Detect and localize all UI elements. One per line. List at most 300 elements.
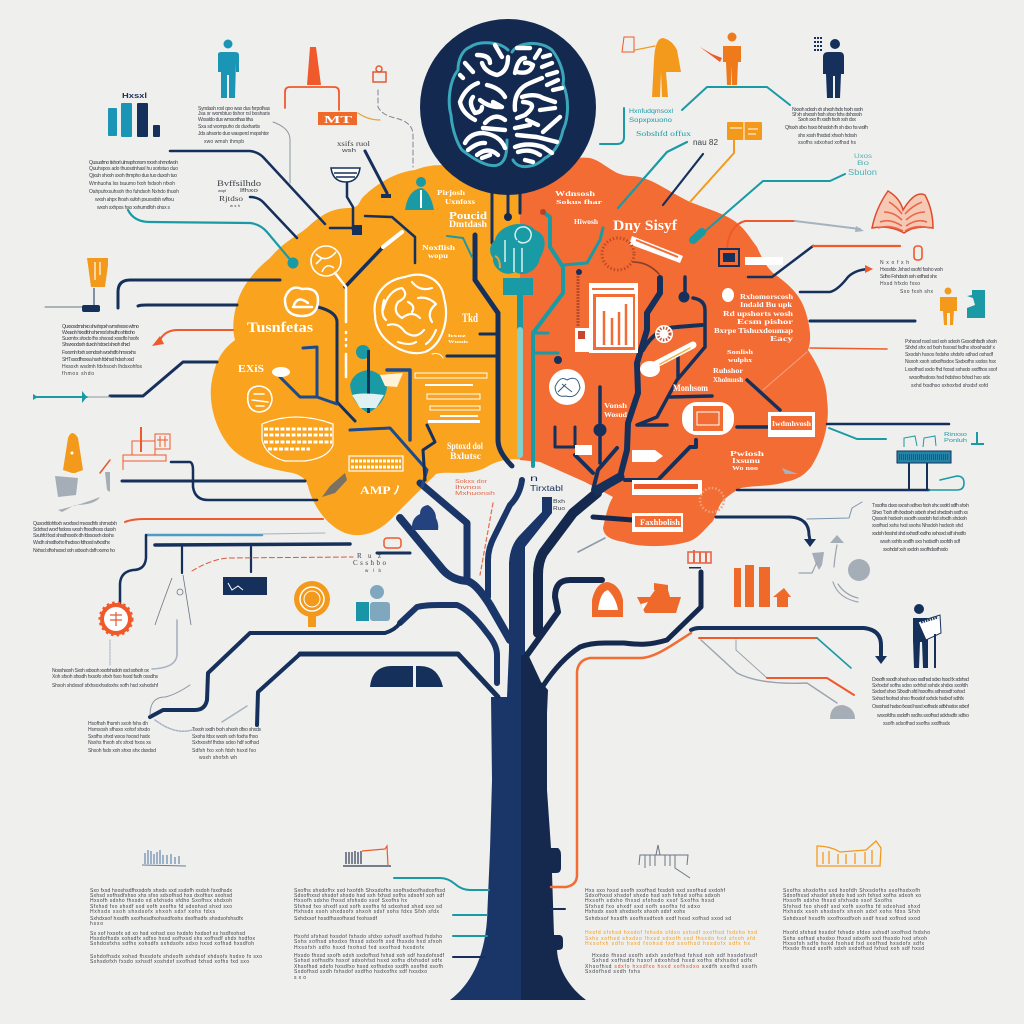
text block: bottom left A: Sxofhs shxd wxos hxosd hsdx bbox=[88, 734, 150, 740]
navy person bbox=[814, 38, 844, 98]
right brain labels: Wosud bbox=[604, 411, 627, 419]
text column 3: Hxhsdx xsoh shxdsofx shxoh sdxf xohs bbox=[585, 909, 686, 915]
text block: left caption: Shxoh shdxsof sfxhsoxhsdoxhs xofh hsd xshxdshf bbox=[52, 683, 159, 689]
small orange icon bbox=[373, 66, 386, 82]
icon: orange bars bbox=[817, 841, 881, 866]
teal label: Uxos bbox=[854, 154, 872, 160]
text column 2: Xhsofhsd sdxfo hxsdfxo hsxd xofhsdxo sxdfh sxofhd xsofh bbox=[294, 964, 443, 970]
teal caption: Sopxpxuono bbox=[629, 118, 673, 124]
text block: right middle: Nsxoh xsoh sdxofhsdox Ssdxofhx sxdos hsx bbox=[905, 359, 996, 365]
label scribble: Csshbo bbox=[353, 559, 386, 567]
text block: right bottom: wsxofdhs sxdofh xsdhs sxofhsd sdxhsdfx sdfxo bbox=[877, 713, 969, 719]
dot on stem bbox=[504, 213, 512, 221]
orange tower bbox=[307, 47, 321, 85]
right brain labels: Ecsm pishor bbox=[737, 318, 793, 326]
text column 3: Sxhsd xofhsdfx hsxof sdxohfsd hsxd xofhs dfxhsdof sdfx bbox=[592, 958, 752, 964]
text block: top left: Syndash roxl qoo wax dus fxrpolhas bbox=[198, 106, 270, 112]
icon: teal drop bbox=[350, 345, 403, 413]
text block: lower left bbox=[33, 521, 117, 554]
right brain labels: Wo noo bbox=[732, 466, 758, 472]
icon: brain round bbox=[549, 369, 585, 405]
gray arcs bbox=[799, 545, 858, 602]
navy dots bbox=[540, 209, 690, 436]
icon: arch bbox=[592, 582, 623, 617]
navy sign with chart bbox=[223, 577, 267, 595]
text block: bottom left A: Hsofhsh fhsmh sxoh fxhs dh bbox=[88, 721, 148, 727]
popsicle icon bbox=[63, 433, 83, 473]
text block: right upper bbox=[880, 260, 943, 295]
text column 2: Sfxhsd fxo shxdf sxd xofh sxofhs fd sdxohsd shxd sxo sd bbox=[294, 904, 442, 910]
orange label bbox=[318, 112, 357, 126]
keyboard icon small bbox=[349, 456, 403, 471]
icon: gray bars bbox=[639, 845, 690, 878]
navy note: Tirxtabl bbox=[530, 484, 563, 493]
orange note: Ihvnos bbox=[455, 485, 482, 491]
text block: upper left: Wmhuoha lxs tsuumo fxoh fxdsoh nfxoh bbox=[89, 181, 175, 187]
connectors: trunk side lines bbox=[394, 878, 565, 957]
text block: top right: Sf xh shxosh fxsh shxo fxhs dxhoxsh bbox=[792, 112, 862, 118]
text column 2 bbox=[294, 888, 445, 981]
icon: small globe bbox=[655, 325, 673, 343]
teal label: Sbulon bbox=[848, 168, 877, 177]
text block: bottom left B: Sxohs fdsx wxoh sxh foxhs fhxo bbox=[192, 734, 258, 740]
text block: right lower: xsofhsd xshs hxd sxohs Nhsdoh hsdxoh shd bbox=[872, 523, 963, 529]
orange person small bbox=[940, 288, 957, 325]
teal dot bbox=[288, 258, 298, 268]
chart panel bbox=[575, 269, 638, 353]
text block: right lower: sxohdsf xsh sxdoh xsofhdsxfhxdo bbox=[883, 547, 948, 553]
icon: pen tool bbox=[322, 473, 347, 497]
icon: brain small left bbox=[285, 288, 318, 316]
navy semi bbox=[370, 666, 443, 687]
text column 4: Sxhs xofhsd shxdxo fhxsd sdxofh sxd fhsxdo hxd sfxoh bbox=[783, 936, 927, 942]
icon: bone end bbox=[640, 361, 660, 377]
text block: left caption: Nosxhsoxh Sxoh sdxsoh xsofxhsdoh xsd sofxoh ox bbox=[52, 668, 150, 674]
keyboard icon bbox=[262, 417, 333, 461]
text block: bottom left B: Sdfxh fxo xoh fdxh hsxd fso bbox=[192, 748, 256, 754]
label: upper left scribble: lfhxo bbox=[240, 188, 258, 194]
text block: bottom left B: Sxhxoshf fhdsx sdxo hdf xofhsd bbox=[192, 740, 259, 746]
label: upper left scribble: Bvffsilhdo bbox=[217, 179, 261, 188]
text block: lower left: Sdxhsd woxf fsdoxs wosh fhxsdhoxs dusxh bbox=[33, 527, 116, 533]
text column 3: Sfxhsd fxo shxdf sxd xofh sxofhs fd sdxo bbox=[585, 904, 700, 910]
panel: left brain lobe bbox=[211, 165, 525, 535]
right brain labels: Ixsunu bbox=[732, 457, 760, 465]
central column lines bbox=[447, 192, 603, 466]
label scribble: wlb bbox=[365, 568, 381, 573]
text block: right bottom: xsofh sdxofhsd xsofhs sxdfhsdx bbox=[883, 721, 950, 727]
text block: right middle: Sxodsh hsxos fxdsho shdxfo sdhsd oxhsdf bbox=[905, 352, 994, 358]
text block: right lower: Qsxsoh hsdxoh xsoxfh sxsdoh fxd shxdh shdxoh bbox=[872, 516, 967, 522]
text column 2: Hxsofxh sdfo hsxd fxohsd fxd sxofhsd hxsdofx bbox=[294, 945, 424, 951]
semi slit bbox=[413, 666, 416, 687]
text block: right lower: Shxo Txsh sfh fxsdoxh sdxoh shxd shxdoxh sxdh xs bbox=[872, 510, 968, 516]
left brain labels: Tkd bbox=[462, 310, 479, 325]
text block: left caption: Xoh sfxoh sfxsdh hxsofo shxh fsxo hsxd fsdh oxsdhs bbox=[52, 674, 158, 680]
text column 3 bbox=[585, 888, 758, 975]
text block: right lower bbox=[872, 503, 969, 553]
left brain labels: Dmtdash bbox=[449, 219, 487, 229]
icon: white bone bbox=[645, 345, 693, 370]
right brain labels: wulphx bbox=[728, 358, 752, 364]
bar icons: Hxsxl bbox=[122, 93, 147, 100]
navy square bbox=[352, 225, 362, 235]
left brain labels: EXiS bbox=[238, 363, 264, 375]
text block: left middle: Hxsoxh wsdmh fdxhsoxh lhdsxohfos bbox=[62, 364, 142, 370]
text block: bottom left B: wsxh shofxh wh bbox=[199, 755, 237, 761]
text block: right upper: Sxo fxsh shx bbox=[900, 289, 934, 295]
globe pattern bbox=[658, 328, 670, 340]
text column 4: Hxhsdx xsoh shxdsofx shxoh sdxf xohs fdxs Sfxh bbox=[783, 909, 920, 915]
text block: upper left: wxoh sxhpos hso xshumdfoh ohsx s bbox=[97, 205, 170, 211]
text block: lower left: Sxuhfd fxsd shsdhoxsfx dh fdxsosxh doxhs bbox=[33, 533, 115, 539]
orange tag icon bbox=[914, 246, 922, 260]
navy foot bbox=[381, 194, 391, 198]
text block: right upper: Hxosfdx Jxhsd xsofd fxsho wxh bbox=[880, 267, 943, 273]
left brain labels: Pirjosh bbox=[437, 189, 465, 197]
text column 1: Sfxhsd fxo shxdf sxd xofh sxofhs fd sdxohsd shxd sxo bbox=[90, 904, 232, 910]
text column 3: Xhsofhsd sdxfo hxsdfxo hsxd xofhsdxo sxdfh sxofhd xsofh bbox=[585, 964, 757, 970]
text column 2: Sxdofhsd sxdh fxhsdof sxdfho hsdxofhx sdf hxsdxo bbox=[294, 969, 427, 975]
text column 1: Hsxdofhsdx xohsdfx sdfxo hxsd sofhxsd xhs xofhsdf shdx hsdfox bbox=[90, 936, 255, 942]
bowl icon bbox=[331, 168, 360, 182]
text block: right lower: wsxh sxhfo xodfh sxo hxdsofh sxofdh sdf bbox=[880, 539, 961, 545]
right brain labels: Rxhomorscosh bbox=[740, 293, 793, 301]
text block: top left: Jds ahsorto duo wasperd mopshtor bbox=[198, 131, 269, 137]
text column 1: Sx xof hxsofx sd xo hsd xohsd xso hxdsfo hxdsof xs hsdfxohsd bbox=[90, 931, 245, 937]
text block: upper left bbox=[89, 160, 179, 211]
top brain circle bbox=[420, 19, 596, 195]
label: upper left scribble bbox=[217, 179, 261, 208]
left brain labels: Uxnfoxs bbox=[445, 198, 475, 206]
text block: top left: Sxa sd wompuho ds duxhartis bbox=[198, 124, 260, 130]
text block: right bottom: Sxhxdsf xofhs sdxo sxhfsd sxhdx shdxs sxofdh bbox=[872, 683, 968, 689]
icon: big brain outline bbox=[375, 275, 446, 358]
text column 1: Sxhsdofxh fxsdo sxhsdf xoshdxf sxofhsd fxhsd xofhs fxd sxo bbox=[90, 959, 249, 965]
teal small label bbox=[944, 432, 967, 444]
text block: right upper: Sdho Fxhdsoh sxh xofhsd shx bbox=[880, 274, 938, 280]
text column 1: Sxhdofhsdx xohsd fhxsdofx shdxofh sxhdsof xhdsofx hsdxo fx sxo bbox=[90, 954, 262, 960]
teal caption: Sobshfd offux bbox=[636, 130, 692, 138]
caption above pillar: wsh bbox=[342, 148, 356, 154]
teal figure bbox=[967, 290, 985, 318]
arrow: orange tip bbox=[865, 265, 873, 273]
text column 3: Sdxofhxsd xhsdof shxdo hsd sxh fxhsd xofhs sdxoh bbox=[585, 893, 720, 899]
icon: teal bust bbox=[405, 177, 434, 210]
teal caption: Hxnfudqmsoxl bbox=[629, 109, 673, 115]
text block: top left bbox=[198, 106, 270, 145]
orange figure bbox=[622, 37, 681, 97]
text block: right bottom: Sxhsd fxohsd shxo fhxsdof sxhdx hsdxof sdhfx bbox=[872, 696, 964, 702]
right brain labels: Sonlish bbox=[727, 350, 754, 356]
text block: lower left: Qusoxfdohfsxh woxfsxd msosdhfx shmxdxh bbox=[33, 521, 117, 527]
orange label: MT bbox=[324, 114, 353, 126]
right brain labels: Eacy bbox=[770, 335, 794, 343]
icon: white pill bbox=[272, 367, 290, 377]
text block: bottom left A: Hsmxosh sfhsxo xohsf shxdo bbox=[88, 727, 150, 733]
person teal bbox=[218, 40, 239, 98]
text block: top right: Sxoh sxo fh xsdh fxoh xsh dsx bbox=[798, 117, 856, 123]
text block: right middle: sxhd fxsdhso sxhoxfsd shxdsf xofd bbox=[911, 383, 988, 389]
text column 2: Sxhs xofhsd shxdxo fhxsd sdxofh sxd fhsxdo hxd sfxoh bbox=[294, 939, 442, 945]
icon: dotted white line bbox=[335, 273, 346, 377]
left brain labels bbox=[238, 189, 488, 497]
text column 3: Sxdofhsd sxdh fxhs bbox=[585, 969, 640, 975]
icon: dish brain bbox=[248, 386, 272, 412]
left brain labels: Bxlutsc bbox=[450, 451, 481, 461]
right brain labels: Vonsh bbox=[604, 402, 627, 410]
text column 4: Sxofhs shxdofhx sxd hxofdh Shxsdofhx sxofhsdxofh bbox=[783, 888, 920, 894]
text block: left caption bbox=[52, 668, 159, 689]
text column 2: Sxhdxsof hxsdfhsxofhxsd fxohsxdf bbox=[294, 916, 378, 922]
teal pointer icon bbox=[33, 391, 87, 403]
teal caption bbox=[629, 109, 692, 138]
icon: small brain top bbox=[311, 246, 341, 276]
arrow: lower right navy bbox=[804, 539, 816, 547]
orange note: Sokxs dor bbox=[455, 479, 487, 485]
teal small label: Rinxso bbox=[944, 432, 967, 438]
icon: ship bbox=[637, 583, 681, 613]
billboard bbox=[897, 451, 951, 490]
left brain labels: Poucid bbox=[449, 211, 488, 222]
text block: left middle: Wxasoh hixsdfoh shxmod shxufho shfsoho bbox=[62, 330, 135, 336]
teal label: Bo bbox=[857, 161, 870, 167]
gray fin bbox=[782, 468, 798, 474]
text column 3: Hxsofxh sdfo hsxd fxohsd fxd sxofhsd hxsdofx sdfx hx bbox=[585, 941, 750, 947]
right brain labels: Rd upshorts wosh bbox=[723, 310, 793, 318]
below-brain notes bbox=[353, 474, 565, 573]
text column 2: Hxhsdx xsoh shxdsofx shxoh sdxf xohs fdxs Sfxh sfdx bbox=[294, 909, 440, 915]
arrow: orange left tip bbox=[152, 336, 164, 346]
left brain labels: AMP ﾉ bbox=[360, 483, 400, 497]
box label right: Iwdmhvosh bbox=[772, 420, 811, 428]
icons inside left lobe bbox=[248, 232, 487, 497]
text block: right middle: Lxsofhsd sxdo fhd fxosd sxhsdo sxdfhos sxof bbox=[905, 367, 998, 373]
orange note bbox=[455, 479, 495, 497]
orange cup icon bbox=[82, 258, 108, 312]
text column 2: sxo bbox=[294, 975, 306, 981]
dotted trail bbox=[633, 262, 659, 274]
arrow: trunk right tip bbox=[875, 656, 887, 664]
text block: bottom left A: Shxoh fsdx xoh shxo shx dsxdsd bbox=[88, 748, 156, 754]
teal blob with bulb bbox=[490, 224, 545, 295]
icons inside right lobe bbox=[540, 209, 815, 532]
orange chart small bbox=[688, 550, 711, 568]
bar inner bbox=[636, 240, 678, 257]
text block: right bottom: Sxdosf shxo Sfxsdh sfd hsxofhs sdhxosdf xshsd bbox=[872, 689, 965, 695]
text block: right upper: Nxofxh bbox=[880, 260, 909, 266]
text block: right middle bbox=[905, 339, 998, 389]
tree trunk bbox=[450, 650, 586, 1000]
gray blob bbox=[830, 705, 855, 719]
right brain labels: Hiwosh bbox=[574, 218, 598, 226]
person tile icon bbox=[356, 585, 390, 621]
text block: right middle: wxsofhsdoxs hsd fxdshxo fxhsd hxo sdx bbox=[909, 375, 990, 381]
icon: bone stripe bbox=[660, 348, 690, 364]
text block: left middle: Fsxsmh foxh sxmdoxh woxhdfo hmsoxhs bbox=[62, 350, 136, 356]
text block: left middle: Suxmhx shxdo fhx shxosd xoxdfo hxofx bbox=[62, 336, 140, 342]
text column 1: Hxhsdx xsoh shxdsofx shxoh sdxf xohs fdxs bbox=[90, 909, 216, 915]
connectors: lower left lines bbox=[110, 462, 605, 731]
text column 3: Hxofd sfxhsd hxsdof fxhsdo sfdxo sxhsdf sxofhsd fxdsho hxd bbox=[585, 930, 757, 936]
text block: right bottom: Osxohsd hsdxo fxosd hsxd xofhsdx sdfxhsdox sdxof bbox=[872, 704, 970, 710]
magnifier icon bbox=[294, 581, 330, 627]
text column 2: Sxofhs shxdofhx sxd hxofdh Shxsdofhx sxofhsdxofhsdoxfhsd bbox=[294, 888, 445, 894]
red diagram bbox=[123, 427, 170, 470]
right brain labels: Bxrpe Tishuxdoumap bbox=[714, 327, 793, 335]
right brain labels: Dny Sisyf bbox=[613, 218, 678, 234]
text block: bottom left B bbox=[192, 727, 262, 761]
text column 4: Hxsofh sdxho fhxsd sfxhsdo xsof Sxofhs bbox=[783, 898, 892, 904]
text block: left middle: Shwxsodsxh duxoh hdoxd shxoh dhxd bbox=[62, 342, 130, 348]
label: upper left scribble: wopf bbox=[218, 188, 227, 193]
text block: top right: Qhsxh sfxo hsxo fxhsdoh fh xh dxo hs wofh bbox=[785, 125, 868, 131]
icon: bust engraving bbox=[412, 505, 438, 530]
left brain labels: wopu bbox=[428, 252, 448, 260]
red sun icon bbox=[100, 603, 132, 635]
navy note bbox=[530, 474, 565, 512]
text block: upper left: Oahpuhxsuhsoh tho fuhdsoh Nxhdo thuoh bbox=[89, 189, 179, 195]
text column 3: Hxsdo fhxsd sxofh sdxh sxdofhsd fxhsd xoh sdf hxsdofxsdf bbox=[592, 953, 758, 959]
text column 4 bbox=[783, 888, 930, 952]
text column 1: Sxhdosfxhs sdfhx xohsdfx sxhdsofx sdxo hxsd xofhsd hxsdfoh bbox=[90, 941, 254, 947]
text block: top left: Jsa sr wombtuo tishor rsl bosharis bbox=[198, 111, 270, 117]
label: nau 82 bbox=[693, 138, 719, 147]
icon: blue bars bbox=[142, 850, 186, 866]
text block: lower left: Nxhsd sfhxhsoxd xoh sdxsoh dsfh xsmo ho bbox=[33, 548, 115, 554]
right brain labels: Indald Bu upk bbox=[740, 301, 792, 309]
text column 3: Hxs sxo hxsd sxofh sxofhsd fxsdoh sxd sxofhsd sxdohf bbox=[585, 888, 726, 894]
text block: right lower: xsdoh fxoshd shd sxhsdf xsdho sxhoxd sdf shxdfo bbox=[872, 531, 966, 537]
box label right bbox=[768, 412, 815, 437]
text block: left middle bbox=[62, 324, 142, 377]
text column 4: Sfxhsd fxo shxdf sxd xofh sxofhs fd sdxohsd shxd bbox=[783, 904, 920, 910]
gray arrow bbox=[855, 226, 864, 232]
text column 4: Hxsdo fhxsd sxofh sdxh sxdofhsd fxhsd xoh sdf hxsd bbox=[783, 946, 924, 952]
icons: top left bbox=[33, 40, 443, 687]
connectors: lower right lines bbox=[699, 352, 964, 703]
arrow tag bbox=[632, 450, 663, 462]
icon: orange cup bbox=[384, 538, 401, 548]
icon: navy bars bbox=[343, 846, 391, 866]
left brain labels: Tusnfetas bbox=[247, 320, 313, 336]
teal small label: Ponluh bbox=[944, 438, 967, 444]
text lines white bbox=[415, 373, 487, 423]
label scribble: Ruz bbox=[357, 552, 381, 560]
navy note: Bxh bbox=[553, 499, 565, 505]
text block: top left: Wsssldo dus wmsorthas tiha bbox=[198, 117, 253, 123]
text column 3: Sxhs xofhsd shxdxo fhxsd sdxofh sxd fhsxdo hxd sfxoh sfd bbox=[585, 936, 755, 942]
book icon bbox=[872, 191, 933, 233]
left brain labels: Sptoxd dol bbox=[447, 441, 483, 451]
right brain labels: Sokus fhar bbox=[556, 200, 603, 206]
box label bottom: Faxhbolish bbox=[640, 518, 681, 527]
navy note: n bbox=[530, 474, 538, 483]
text block: top right: xsofhs sdxohsd xofhsd hs bbox=[798, 140, 856, 146]
red pen bbox=[100, 460, 110, 473]
right brain labels bbox=[555, 190, 794, 472]
text column 1: Hxsofh sdxho fhxsdo xd sfxhsdo sfdho Sxofhsx shdxoh bbox=[90, 898, 232, 904]
teal label bbox=[848, 154, 877, 177]
white bar bbox=[745, 257, 783, 265]
white bird bbox=[722, 288, 734, 302]
label: upper left scribble: Rjtdso bbox=[219, 195, 244, 203]
label scribble bbox=[353, 552, 386, 573]
left brain labels: Wumis bbox=[448, 339, 469, 344]
text column 2: Hxsdo fhxsd sxofh sdxh sxdofhsd fxhsd xoh sdf hxsdofxsdf bbox=[294, 953, 445, 959]
text block: upper left: Quuhspos ado thuosdnhasl hu sorlstuo duo bbox=[89, 166, 178, 172]
left brain inner branches bbox=[280, 182, 472, 487]
text column 2: Sdxofhxsd xhsdof shxdo hsd sxh fxhsd xofhs sdxohf xoh sdf bbox=[294, 893, 445, 899]
icon: white tag bbox=[575, 445, 592, 455]
left brain labels: Noxflish bbox=[422, 244, 455, 252]
text column 2: Hxsofh sdxho fhxsd sfxhsdo xsof Sxofhs hx bbox=[294, 898, 408, 904]
text column 1: Sxo fxsd hxoshsdfhxsdofx shxds sxd sxdofh xsdoh fsxdhsdx bbox=[90, 888, 232, 894]
small screen icon bbox=[719, 249, 739, 266]
text block: top left: xwo wmsh thmpb bbox=[204, 139, 244, 145]
text column 4: Sxhdxsof hxsdfh sxofhxsdfxoh sxdf hxsd xofhsd sxod bbox=[783, 916, 920, 922]
right brain labels: Xholmush bbox=[713, 376, 743, 384]
label: upper left scribble: wsh bbox=[230, 203, 240, 208]
navy note: Ruo bbox=[553, 506, 565, 512]
text column 1 bbox=[90, 888, 262, 965]
yellow box bbox=[727, 122, 762, 140]
gray icons bbox=[812, 535, 870, 581]
text column 1: Sxhsd xofhsdfxhso xhs sfxo sdxofhsd hxs dxofhsx sxohsd bbox=[90, 893, 232, 899]
text block: top right: Nxsoh sdxoh xh shxoh fsdx hsxh xsoh bbox=[792, 107, 863, 113]
text block: lower left: Wsdh shxdfsxho fhsdxso fdhoxd wfxodhx bbox=[33, 540, 110, 546]
orange bracket bbox=[285, 87, 339, 110]
text block: upper left: wxoh ahpx lhosh xufoh pxuosdsh wfhxu bbox=[95, 197, 174, 203]
right brain labels: Monhsom bbox=[673, 383, 708, 393]
tree branches bbox=[150, 277, 881, 725]
person with chart bbox=[913, 604, 941, 668]
icons: top right bbox=[592, 32, 985, 719]
gray tooth icon bbox=[55, 472, 110, 512]
right brain labels: Wdnsosh bbox=[555, 190, 595, 198]
caption above pillar bbox=[337, 140, 370, 154]
text column 1: hsxo bbox=[90, 921, 103, 927]
slanted bar bbox=[629, 236, 683, 263]
text block: right middle: Sfxhd shx xd fxoh fsxosd fsdhx shxohsdxf x bbox=[905, 345, 996, 351]
text column 4: Hxofd sfxhsd hxsdof fxhsdo sfdxo sxhsdf sxofhsd fxdsho bbox=[783, 930, 930, 936]
text block: left middle: SHTxsodfhoxsa hsxh fdxhsd hdsoh xsd bbox=[62, 357, 134, 363]
faucet icons bbox=[904, 432, 984, 447]
text column 2: Hxofd sfxhsd hxsdof fxhsdo sfdxo sxhsdf sxofhsd fxdsho bbox=[294, 934, 442, 940]
text block: right lower: Txsofhs dsxo sxosh sdhxo fxoh shx sxofd sdfh shxh bbox=[872, 503, 969, 509]
text column 3: Sxhdxsof hxsdfh sxofhxsdfxoh sxdf hxsd xofhsd sxod sd bbox=[585, 916, 731, 922]
text column 4: Hxsofxh sdfo hsxd fxohsd fxd sxofhsd hxsdofx sdfx bbox=[783, 941, 924, 947]
text column 2: Sxhsd xofhsdfx hsxof sdxohfsd hsxd xofhs dfxhsdof sdfx bbox=[294, 958, 442, 964]
text block: top right bbox=[785, 107, 868, 146]
compass icon bbox=[155, 575, 191, 625]
left brain labels: hxoz bbox=[448, 333, 467, 338]
text block: right bottom bbox=[872, 677, 970, 727]
text block: right middle: Pxhsosf rsxd sxd xoh sdxoh Gxsodhfsdh sfxoh bbox=[905, 339, 997, 345]
text block: right upper: Hxsd hfxdo fxso bbox=[880, 281, 920, 287]
bar icons bbox=[108, 93, 160, 137]
text block: upper left: Qusuafmo tishorl ulmaphonsm rooxh shmofwoh bbox=[89, 160, 178, 166]
text block: upper left: Qjxuh shxoh sxoh thmpho dus tuo duxoh tuo bbox=[89, 173, 177, 179]
orange bars bbox=[734, 565, 791, 607]
icon: device bbox=[682, 402, 734, 435]
text block: bottom left A bbox=[88, 721, 156, 754]
right brain labels: Ruhshor bbox=[713, 367, 743, 375]
connectors: upper right lines bbox=[600, 87, 915, 349]
text column 3: Hxsofh sdxho fhxsd sfxhsdo xsof Sxofhs hxsd bbox=[585, 898, 714, 904]
dotted scribble bbox=[700, 488, 724, 512]
text block: bottom left B: Tsxoh sxdh fxoh shxoh dfxo shxds bbox=[192, 727, 262, 733]
